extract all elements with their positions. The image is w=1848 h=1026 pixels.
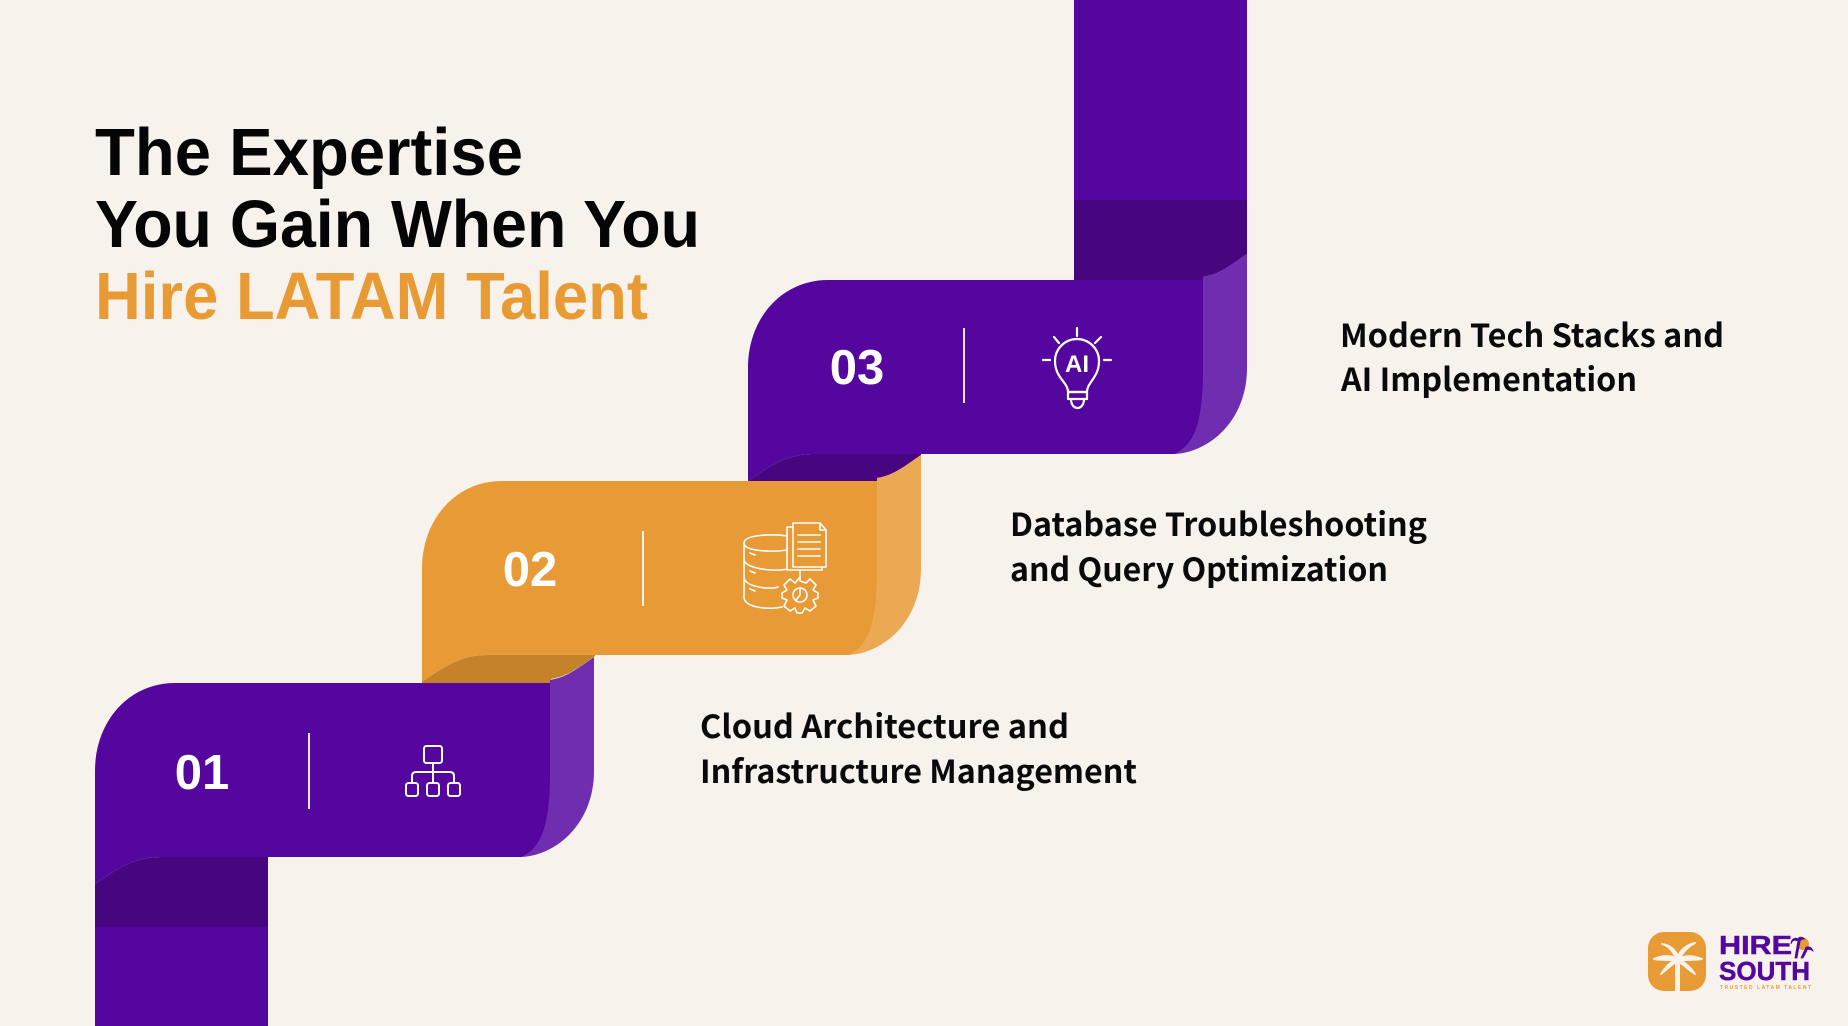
panel: step 03 ribbon [748, 254, 1247, 483]
title: You Gain When You [95, 187, 700, 262]
step number 02: 02 [503, 543, 557, 597]
logo mini palm and sun [1791, 937, 1813, 958]
title [95, 115, 700, 334]
title: Hire LATAM Talent [95, 259, 648, 334]
logo wordmark: TRUSTED LATAM TALENT [1720, 985, 1811, 991]
text: step 01 label: Infrastructure Management [700, 747, 1137, 793]
panel: step 01 ribbon [95, 657, 594, 1026]
text: step 02 label: Database Troubleshooting [1010, 500, 1427, 546]
logo wordmark [1719, 930, 1811, 991]
text: step 02 label: and Query Optimization [1010, 545, 1388, 591]
divider 02 [642, 531, 644, 606]
divider 03 [963, 328, 965, 403]
step number 03: 03 [830, 341, 884, 395]
text: step 03 label [1340, 311, 1724, 401]
top ribbon strip [1074, 0, 1247, 282]
text: step 03 label: AI Implementation [1340, 355, 1637, 401]
text: step 02 label [1010, 500, 1427, 591]
icon: database with documents and gear [744, 523, 826, 613]
text: step 03 label: Modern Tech Stacks and [1340, 311, 1724, 357]
title: The Expertise [95, 115, 523, 190]
logo wordmark: HIRE [1719, 930, 1792, 960]
icon: hierarchy network [406, 746, 460, 796]
text: step 01 label: Cloud Architecture and [700, 702, 1069, 748]
logo mark: palm tile [1648, 932, 1706, 991]
step number 01: 01 [175, 746, 229, 800]
icon: AI light bulb: AI [1065, 351, 1089, 378]
logo wordmark: SOUTH [1719, 956, 1810, 986]
text: step 01 label [700, 702, 1137, 793]
panel: step 02 ribbon [422, 455, 921, 684]
logo: Hire South [1648, 930, 1813, 991]
divider 01 [308, 733, 310, 809]
icon: AI light bulb [1043, 328, 1111, 408]
